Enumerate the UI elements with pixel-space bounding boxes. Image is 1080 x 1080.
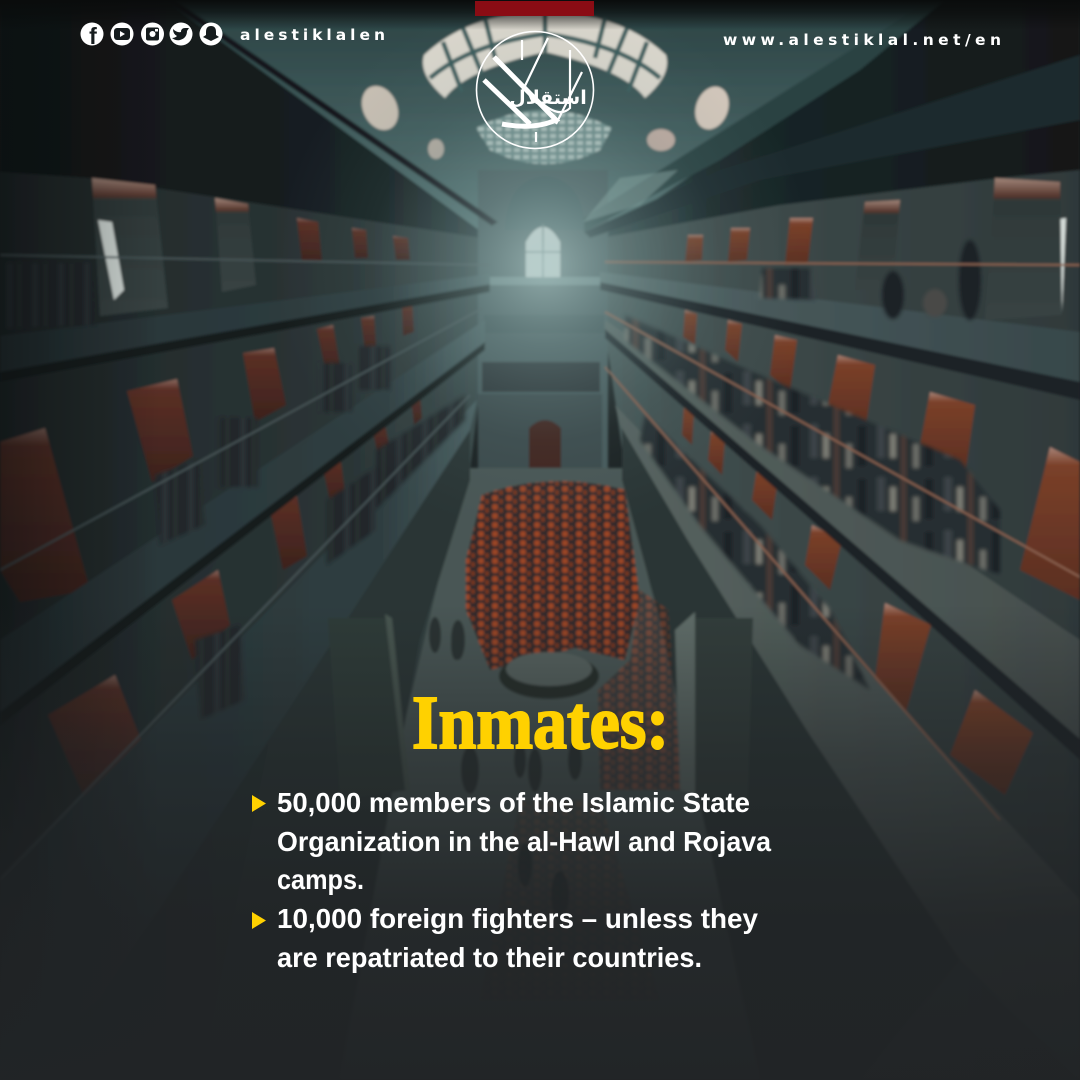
bullet 2 text: are repatriated to their countries.: [277, 942, 702, 973]
logo: circular calligraphy emblem: استقلال: [509, 87, 587, 109]
arched window: [526, 227, 560, 277]
bullet 1 text: [277, 787, 771, 895]
balcony slabs left: [0, 274, 490, 1080]
back wall and door: [478, 394, 602, 472]
bullet 1 text: 50,000 members of the Islamic State: [277, 787, 750, 818]
doors left: [0, 218, 422, 810]
doors right: [682, 218, 1080, 795]
icon: facebook: f: [89, 23, 97, 49]
doors left: top row: [92, 178, 256, 316]
orange crowd: [466, 481, 640, 670]
vault around skylight: [165, 0, 945, 238]
logo: circular calligraphy emblem: [476, 32, 594, 148]
red top bar: [475, 1, 594, 16]
fountain: [499, 653, 599, 699]
pillars: [328, 612, 753, 800]
people on balconies: [7, 240, 1000, 720]
icon: snapchat: [200, 22, 222, 46]
balcony slabs right: [600, 272, 1080, 1080]
icon: facebook: [80, 22, 104, 49]
people on floor: [429, 617, 582, 919]
left ceiling beam: [165, 0, 498, 226]
white slivers in top row doors: [98, 218, 1066, 316]
railings: [0, 255, 1080, 880]
side crowd: [598, 590, 682, 790]
bullet 1 text: Organization in the al-Hawl and Rojava: [277, 826, 771, 857]
shadowed cavern left: [200, 430, 470, 1080]
handle: alestiklalen: alestiklalen: [240, 26, 385, 44]
website url: www.alestiklal.net/en: [723, 31, 1001, 49]
bullet arrow 1: [252, 795, 266, 812]
shadowed cavern right: [622, 425, 960, 1080]
bullet 2 text: [277, 903, 758, 973]
bullet arrow 2: [252, 912, 266, 929]
edge vignette left: [0, 0, 160, 1080]
back wall: [478, 170, 608, 480]
social icons row: [80, 22, 222, 49]
far balconies in back wall: [480, 277, 605, 285]
left wall: [0, 160, 500, 1080]
left floor crowd: [480, 800, 660, 1000]
underside teal band right: [584, 55, 1080, 238]
icon: twitter: [170, 22, 192, 46]
icon: youtube: [110, 22, 134, 46]
bullet 1 text: camps.: [277, 864, 364, 895]
floor: [320, 468, 770, 1080]
right ceiling beam: [584, 0, 945, 232]
icon: instagram: [141, 22, 164, 46]
doors right: top row: [855, 178, 1062, 320]
right ceiling: [580, 0, 1080, 240]
bullet list: [252, 787, 771, 973]
title: Inmates:: [412, 681, 669, 765]
top shadow: [0, 0, 1080, 30]
skylight: [423, 12, 667, 230]
bullet 2 text: 10,000 foreign fighters – unless they: [277, 903, 758, 934]
hanging lamps: [355, 80, 735, 222]
right wall: [590, 160, 1080, 1080]
left ceiling: [0, 0, 505, 240]
